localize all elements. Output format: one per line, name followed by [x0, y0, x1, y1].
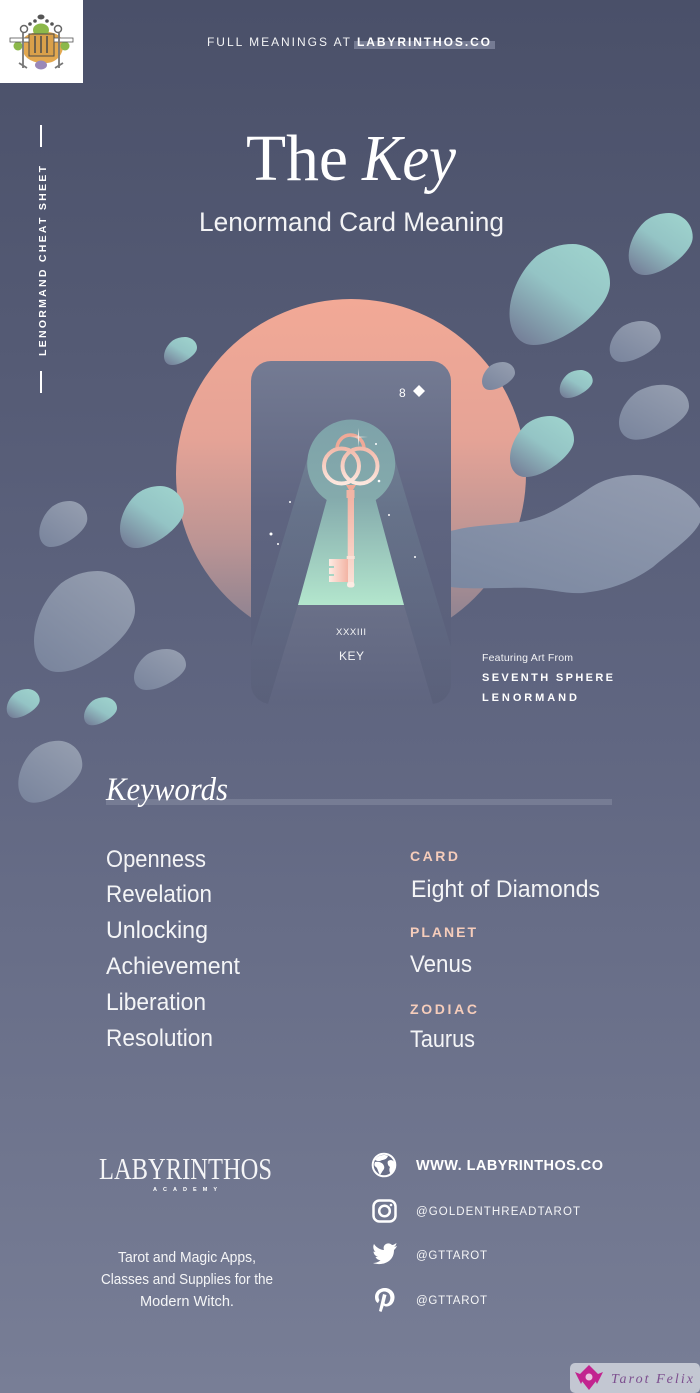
card attributes: ZODIAC	[410, 1001, 477, 1017]
top link	[207, 35, 495, 49]
keyword list: Liberation	[106, 989, 206, 1016]
watermark: tarot felix	[570, 1363, 700, 1393]
card name: KEY	[339, 649, 364, 663]
tagline: Tarot and Magic Apps,	[118, 1250, 256, 1266]
side label: LENORMAND CHEAT SHEET	[37, 165, 49, 356]
labyrinthos logo	[99, 1151, 272, 1193]
card attributes	[410, 848, 600, 1053]
instagram handle: @GOLDENTHREADTAROT	[416, 1206, 580, 1218]
title	[246, 122, 457, 195]
keyhole	[298, 419, 404, 605]
top link: LABYRINTHOS.CO	[357, 35, 490, 49]
keyword list: Resolution	[106, 1025, 213, 1052]
card attributes: PLANET	[410, 924, 476, 940]
light beam	[268, 460, 435, 594]
icon: pinterest	[375, 1288, 395, 1312]
keywords heading	[105, 772, 612, 808]
subtitle: Lenormand Card Meaning	[199, 207, 504, 237]
website: WWW. LABYRINTHOS.CO	[416, 1158, 603, 1174]
keyword list: Unlocking	[106, 917, 208, 944]
stars	[270, 443, 416, 558]
keyword list: Achievement	[106, 953, 240, 980]
art credit: Featuring Art From	[482, 652, 573, 664]
key	[324, 435, 378, 588]
card attributes: CARD	[410, 848, 458, 864]
tarot card	[251, 361, 451, 660]
roman numeral: XXXIII	[336, 627, 366, 638]
art credit: SEVENTH SPHERE	[482, 672, 613, 684]
keywords heading: Keywords	[105, 772, 228, 808]
card attributes: Eight of Diamonds	[411, 876, 600, 903]
keyword list: Revelation	[106, 881, 212, 908]
lower beam	[268, 605, 433, 704]
art credit: LENORMAND	[482, 692, 577, 704]
icon: instagram	[374, 1200, 396, 1222]
icon: twitter	[373, 1243, 397, 1264]
sun circle	[176, 299, 526, 649]
tagline: Modern Witch.	[140, 1294, 234, 1310]
logo badge	[0, 0, 83, 83]
sparkle	[350, 428, 368, 447]
art credit	[482, 652, 613, 704]
labyrinthos logo: LABYRINTHOS	[99, 1151, 272, 1186]
card attributes: Taurus	[410, 1026, 475, 1053]
top link: FULL MEANINGS AT	[207, 35, 351, 49]
card attributes: Venus	[410, 951, 472, 978]
blobs: scattered	[7, 213, 693, 803]
pinterest handle: @GTTAROT	[416, 1295, 487, 1307]
watermark: tarot felix: Tarot Felix	[611, 1372, 694, 1387]
keyword list: Openness	[106, 846, 206, 873]
twitter handle: @GTTAROT	[416, 1250, 487, 1262]
labyrinthos logo: ACADEMY	[153, 1187, 217, 1193]
diamond	[413, 385, 425, 397]
tagline: Classes and Supplies for the	[101, 1272, 273, 1288]
card number: 8	[399, 386, 406, 400]
title: Key	[361, 122, 457, 195]
tagline	[101, 1250, 273, 1310]
blob: large wave	[430, 475, 700, 593]
icon: globe	[373, 1154, 395, 1176]
keyword list	[106, 846, 240, 1052]
title: The	[246, 122, 348, 195]
